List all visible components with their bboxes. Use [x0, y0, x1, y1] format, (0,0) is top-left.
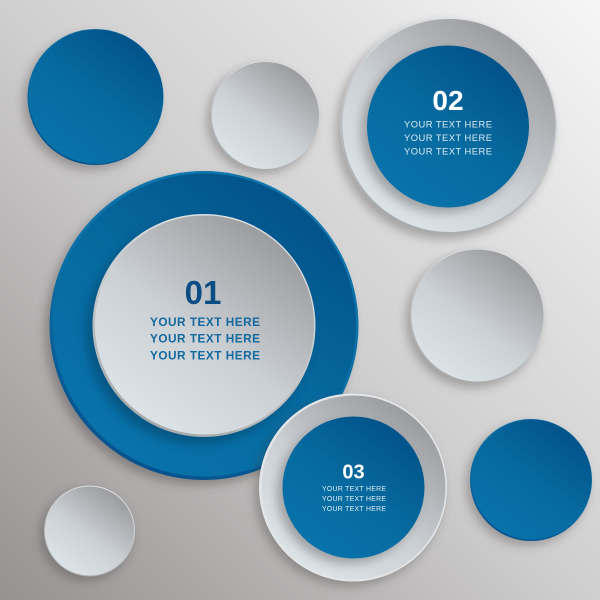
- text lines 01: YOUR TEXT HERE: [150, 332, 260, 346]
- text lines 02: YOUR TEXT HERE: [404, 119, 492, 130]
- panel: step 03: [255, 394, 447, 586]
- panel: step 02: [336, 18, 557, 239]
- circle: large blue ring 01: [45, 171, 358, 485]
- text lines 03: [322, 486, 386, 513]
- text lines 01: YOUR TEXT HERE: [150, 315, 260, 329]
- circle: blue right: [466, 419, 592, 546]
- text lines 02: YOUR TEXT HERE: [404, 132, 492, 143]
- circle: blue top left: [23, 29, 164, 170]
- text lines 03: YOUR TEXT HERE: [322, 496, 386, 503]
- number 03: 03: [342, 461, 365, 483]
- panel: step 01 disc: [86, 214, 316, 444]
- text lines 03: YOUR TEXT HERE: [322, 506, 386, 513]
- number 02: 02: [432, 85, 464, 116]
- text lines 01: YOUR TEXT HERE: [150, 348, 260, 362]
- circle: grey right: [406, 249, 544, 388]
- text lines 03: YOUR TEXT HERE: [322, 486, 386, 493]
- text lines 02: [404, 119, 492, 156]
- circle: small grey top: [207, 62, 320, 174]
- number 01: 01: [185, 274, 221, 311]
- text lines 02: YOUR TEXT HERE: [404, 145, 492, 156]
- circle: small grey bottom left: [40, 486, 135, 581]
- text lines 01: [150, 315, 260, 362]
